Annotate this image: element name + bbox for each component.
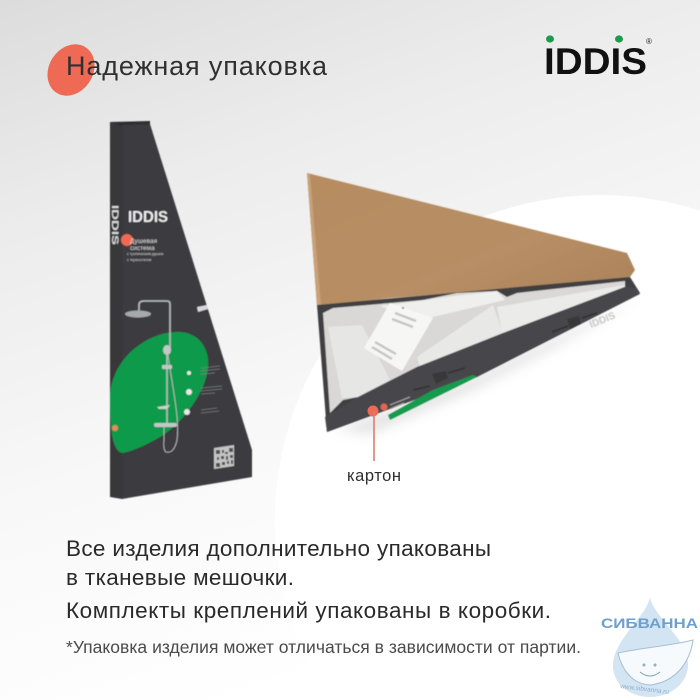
box feature icons bbox=[184, 371, 192, 415]
box heading: система bbox=[130, 245, 155, 252]
tray slots bbox=[413, 313, 597, 390]
box spine bbox=[110, 122, 122, 499]
inner card right bbox=[497, 285, 625, 335]
watermark name: СИБВАННА bbox=[601, 616, 698, 631]
inner card middle bbox=[417, 305, 503, 367]
description text: в тканевые мешочки. bbox=[66, 565, 294, 590]
instruction sheet bbox=[364, 303, 433, 371]
footnote: *Упаковка изделия может отличаться в зависимости от партии. bbox=[66, 637, 581, 657]
callout: картон bbox=[347, 406, 401, 485]
logo: IDDIS: ® bbox=[646, 37, 652, 46]
accent blob bbox=[38, 35, 104, 105]
description text bbox=[66, 536, 551, 623]
title with accent blob bbox=[38, 35, 328, 105]
inner card left bbox=[328, 325, 390, 398]
water drop bbox=[613, 597, 688, 697]
tray tabs bbox=[432, 371, 448, 384]
callout dot bbox=[368, 406, 378, 416]
box top edge bbox=[110, 121, 150, 126]
description text: Комплекты креплений упакованы в коробки. bbox=[66, 598, 551, 623]
bathtub face bbox=[640, 664, 660, 676]
box feature captions bbox=[201, 366, 222, 413]
callout label: картон bbox=[347, 467, 401, 485]
QR code bbox=[214, 445, 234, 469]
lid left edge bbox=[307, 173, 321, 306]
box heading: с тропическим душем bbox=[127, 252, 164, 256]
description text: Все изделия дополнительно упакованы bbox=[66, 536, 491, 561]
title text: Надежная упаковка bbox=[66, 51, 328, 81]
white packaging bbox=[323, 281, 625, 413]
box front bbox=[122, 124, 252, 499]
cardboard lid bbox=[307, 173, 635, 306]
open box bbox=[307, 173, 640, 434]
logo: IDDIS: IDDIS bbox=[544, 41, 647, 82]
green strip bbox=[388, 375, 477, 420]
tray front wall bbox=[325, 286, 640, 432]
callout line bbox=[373, 411, 375, 461]
watermark: Сибванна bbox=[601, 597, 698, 697]
open box shadow bbox=[335, 296, 640, 434]
closed product box bbox=[110, 121, 252, 499]
shower illustration bbox=[125, 301, 178, 452]
box heading bbox=[127, 238, 164, 262]
box orange dot bbox=[121, 234, 133, 246]
watermark url: www.sibvanna.ru bbox=[619, 683, 670, 696]
box logo: IDDIS bbox=[128, 209, 168, 226]
box spine dot bbox=[112, 425, 118, 431]
box heading: с термостатом bbox=[127, 258, 152, 262]
green blob on box bbox=[110, 332, 208, 453]
box heading: Душевая bbox=[130, 238, 158, 245]
bathtub bbox=[618, 640, 693, 685]
tray label bbox=[380, 397, 410, 410]
tray logo: IDDIS bbox=[588, 310, 617, 331]
box side notch bbox=[197, 305, 208, 312]
crumpled fabric bbox=[380, 291, 505, 320]
box spine logo: IDDIS bbox=[110, 205, 120, 245]
tray back and sides bbox=[317, 277, 640, 432]
